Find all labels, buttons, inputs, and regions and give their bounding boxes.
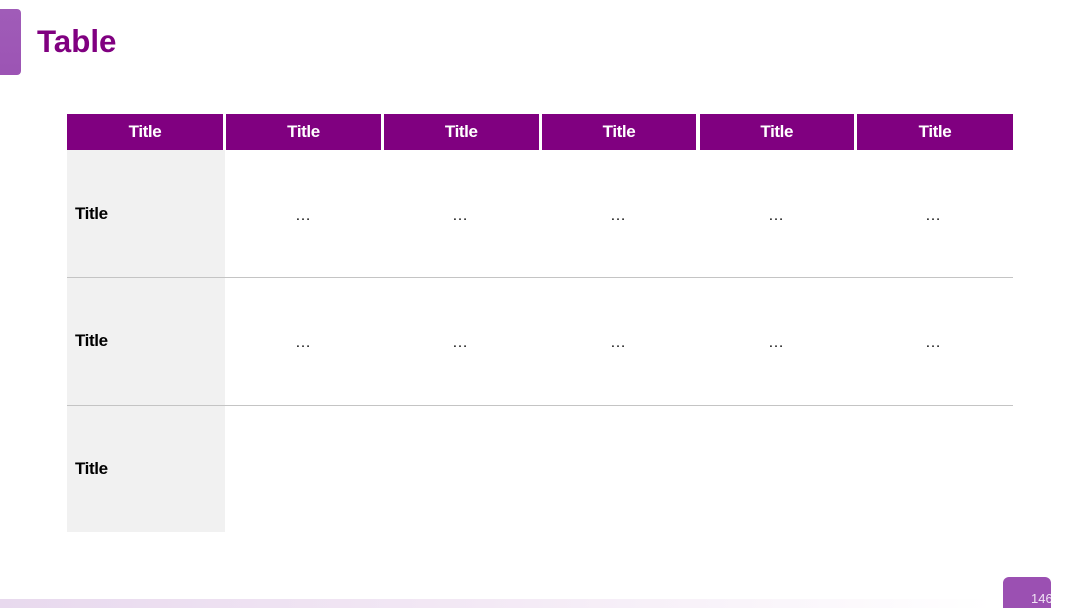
row 2 cell 3: … [610, 334, 626, 351]
header cell 4 [542, 114, 696, 150]
row 2 cell 2: … [452, 334, 468, 351]
row 1 cell 5: … [925, 207, 941, 224]
row 2 cell 5: … [925, 334, 941, 351]
row label 2: Title [75, 331, 108, 350]
header cell 1: Title [129, 122, 161, 141]
header cell 6: Title [919, 122, 951, 141]
header cell 5: Title [760, 122, 793, 141]
header cell 6 [857, 114, 1013, 150]
header cell 3: Title [445, 122, 478, 141]
page number badge [1003, 577, 1051, 608]
header cell 2 [226, 114, 381, 150]
header cell 1 [67, 114, 223, 150]
header cell 4: Title [603, 122, 635, 141]
row 1 cell 4: … [768, 207, 784, 224]
bottom gradient bar [0, 599, 1080, 608]
header cell 2: Title [287, 122, 320, 141]
first column background [67, 150, 225, 532]
row 1 cell 1: … [295, 207, 311, 224]
header cell 5 [700, 114, 854, 150]
row 1 cell 2: … [452, 207, 468, 224]
title: Table [37, 24, 116, 59]
row label 3: Title [75, 459, 108, 478]
row 2 cell 4: … [768, 334, 784, 351]
table [67, 150, 1013, 532]
row 2 cell 1: … [295, 334, 311, 351]
row label 1: Title [75, 204, 108, 223]
row 1 cell 3: … [610, 207, 626, 224]
accent tab [0, 9, 21, 75]
header cell 3 [384, 114, 538, 150]
